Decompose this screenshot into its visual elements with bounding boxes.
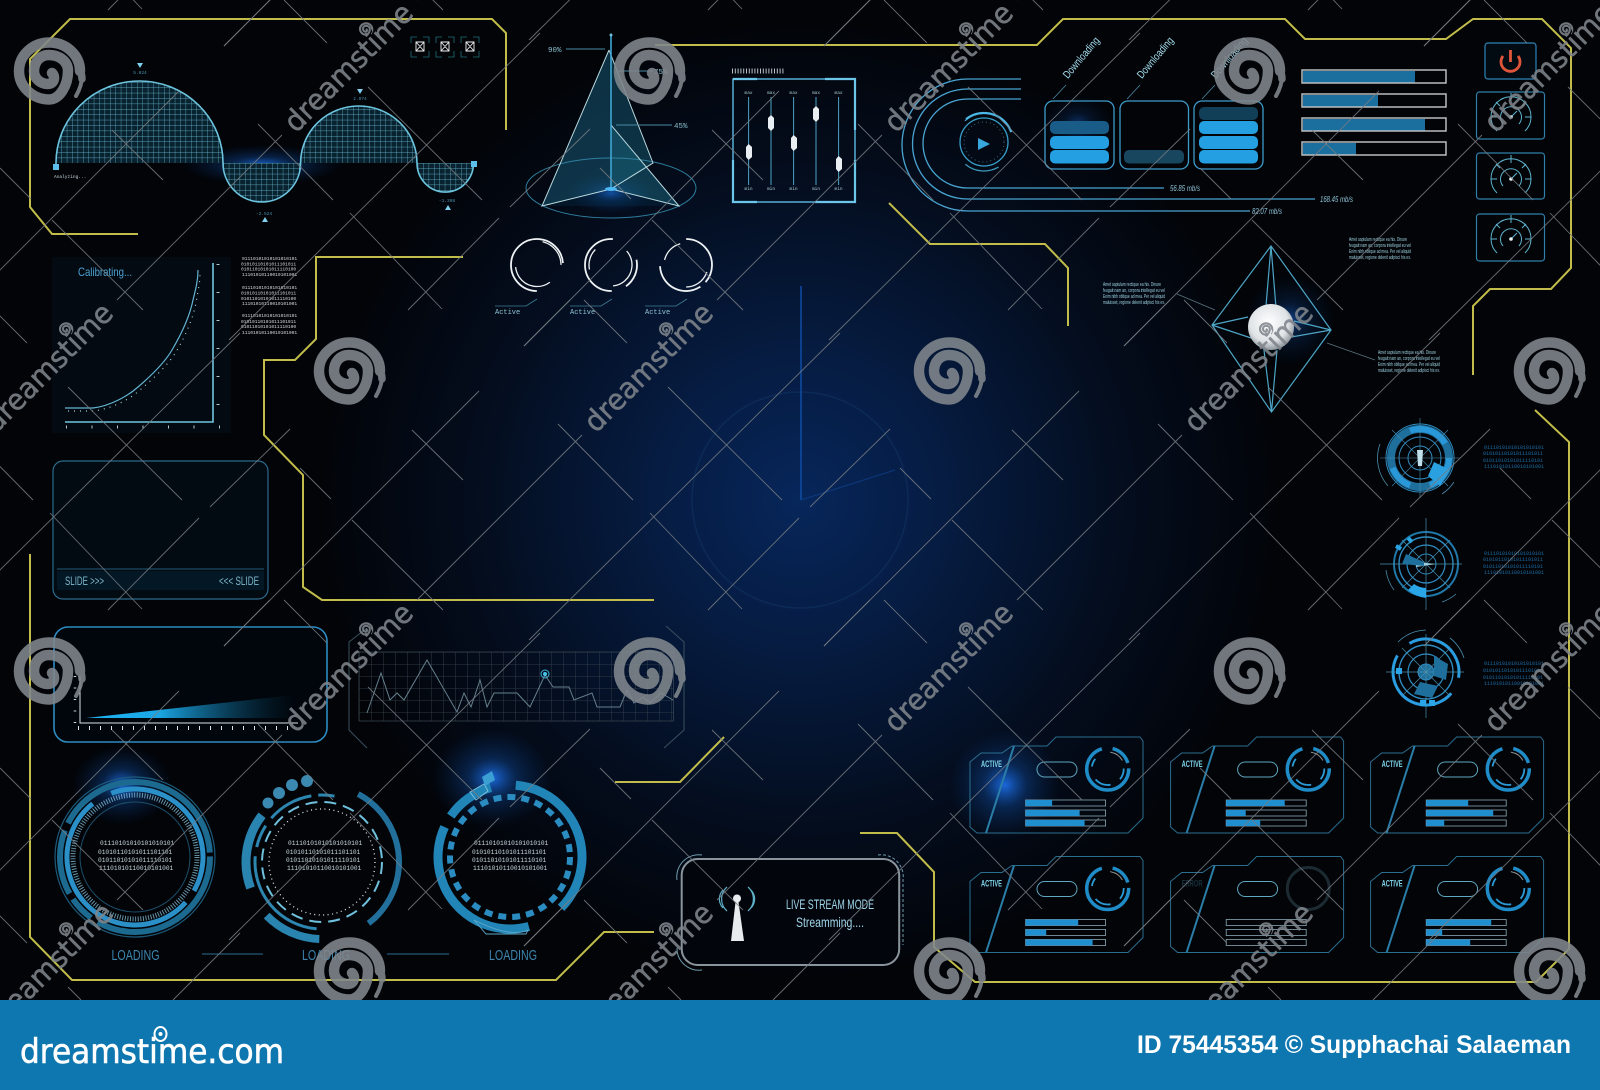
panel: downloading boxes: Downloading xyxy=(1061,35,1102,81)
panel: equalizer sliders: min xyxy=(745,186,753,192)
panel: live stream mode: LIVE STREAM MODE xyxy=(786,896,874,912)
panel: slide: <<< SLIDE xyxy=(219,574,259,588)
panel: sine wave grid chart: 5.024 xyxy=(133,70,147,76)
panel: equalizer sliders: min xyxy=(835,186,843,192)
panel: sine wave grid chart xyxy=(53,63,477,222)
card 4 xyxy=(970,856,1143,952)
footer logo: dreamstime.com xyxy=(20,1032,284,1072)
labels: transfer speed: 56.85 mb/s xyxy=(1170,184,1200,193)
text: binary side columns xyxy=(1483,445,1544,687)
card 3: ACTIVE xyxy=(1382,759,1403,769)
text: description blocks: Enim nibh oblique ad mea. Per vel aliquid xyxy=(1349,249,1411,255)
labels: transfer speed: 82.07 mb/s xyxy=(1252,207,1282,216)
text: binary inside rings: 11101010110010101001 xyxy=(99,865,174,872)
text: binary column: 01011010101011110100 xyxy=(241,266,296,272)
panel: downloading boxes: Downloading xyxy=(1135,35,1176,81)
dial: radar 3 xyxy=(1381,627,1471,718)
panel: equalizer sliders xyxy=(732,71,855,202)
text: binary column xyxy=(241,256,297,336)
labels: active xyxy=(495,299,687,317)
text: binary column: 11101010110010101001 xyxy=(242,272,297,278)
dial: radar 2 xyxy=(1380,518,1462,610)
text: binary column: 01110101010101010101 xyxy=(242,256,297,262)
panel: sine wave grid chart: 2.074 xyxy=(353,96,367,102)
panel: sine wave grid chart: Analyzing... xyxy=(54,174,86,180)
text: binary inside rings: 01010110101011101101 xyxy=(286,849,361,856)
text: description blocks: Amet sapiulam rectique ea his. Dinure xyxy=(1378,350,1436,356)
text: binary inside rings: 01011010101011110101 xyxy=(286,857,361,864)
panel: downloading boxes xyxy=(1045,35,1263,169)
text: description blocks: feugait nam an, corpora intellegat eu vel xyxy=(1378,356,1440,362)
text: binary column: 01010110101011101011 xyxy=(241,319,296,325)
labels: active: Active xyxy=(495,309,520,317)
panel: progress bars xyxy=(1302,70,1446,155)
diagram: polyhedron with sphere xyxy=(1177,246,1375,412)
button: power xyxy=(1485,43,1536,79)
text: binary side columns: 01110101010101010101 xyxy=(1484,551,1544,557)
text: binary side columns: 01011010101011110101 xyxy=(1483,675,1543,681)
card 4: ACTIVE xyxy=(981,878,1002,888)
panel: calibrating curve chart xyxy=(52,257,231,433)
icons: window controls xyxy=(411,37,479,57)
text: description blocks: feugait nam an, corpora intellegat eu vel xyxy=(1103,288,1165,294)
text: description blocks: maluisset, regione delenit adipisci his ex. xyxy=(1103,300,1165,306)
text: binary inside rings xyxy=(98,840,549,872)
panel: equalizer sliders: max xyxy=(835,91,843,96)
icon: antenna xyxy=(719,887,755,941)
panel: downloading boxes: Downloading xyxy=(1209,35,1250,81)
text: binary side columns: 11101010110010101001 xyxy=(1484,464,1544,470)
panel: equalizer sliders: max xyxy=(745,91,753,96)
text: binary side columns: 01011010101011110101 xyxy=(1483,564,1543,570)
text: description blocks: maluisset, regione delenit adipisci his ex. xyxy=(1349,255,1411,261)
panel: live stream mode: Streamming.... xyxy=(796,914,864,930)
labels: loading xyxy=(112,947,537,964)
watermark: spirals, wordmarks and crossed lines: dreamstime xyxy=(1177,896,1320,1039)
icons: active rings xyxy=(507,229,722,301)
text: binary side columns: 01011010101011110101 xyxy=(1483,458,1543,464)
text: binary column: 11101010110010101001 xyxy=(242,330,297,336)
text: binary side columns: 11101010110010101001 xyxy=(1484,681,1544,687)
labels: loading: LOADING xyxy=(112,947,160,964)
text: binary column: 01110101010101010101 xyxy=(242,285,297,291)
labels: transfer speed: 168.45 mb/s xyxy=(1320,195,1353,204)
card 6 xyxy=(1371,856,1544,952)
panel: area wedge chart xyxy=(54,627,327,742)
text: binary inside rings: 11101010110010101001 xyxy=(473,865,548,872)
text: binary side columns: 01010110101011101011 xyxy=(1483,451,1543,457)
footer banner xyxy=(0,1000,1600,1090)
panel: live stream mode xyxy=(677,855,903,970)
gauges: three dials xyxy=(1476,92,1544,261)
text: binary inside rings: 01110101010101010101 xyxy=(100,840,175,847)
panel: sine wave grid chart: -1.398 xyxy=(439,198,455,204)
text: binary side columns: 01010110101011101011 xyxy=(1483,557,1543,563)
text: description blocks: Amet sapiulam rectique ea his. Dinure xyxy=(1349,237,1407,243)
glow: blue lights xyxy=(72,95,1335,840)
text: binary inside rings: 01010110101011101101 xyxy=(98,849,173,856)
labels: loading: LOADING xyxy=(489,947,537,964)
text: description blocks: maluisset, regione delenit adipisci his ex. xyxy=(1378,368,1440,374)
panel: equalizer sliders: min xyxy=(812,186,820,192)
watermark: spirals, wordmarks and crossed lines: dreamstime xyxy=(577,896,720,1039)
panel: slide: SLIDE >>> xyxy=(65,574,104,588)
text: binary column: 01011010101011110100 xyxy=(241,324,296,330)
card 2: ACTIVE xyxy=(1182,759,1203,769)
card 3 xyxy=(1371,737,1544,833)
text: description blocks: Amet sapiulam rectique ea his. Dinure xyxy=(1103,282,1161,288)
chart: 3D cone percentages: 75% xyxy=(654,69,668,77)
ring: loading gauge 3 xyxy=(432,771,588,935)
ring: loading gauge 2 xyxy=(218,758,426,966)
card 5: error xyxy=(1171,856,1344,952)
text: binary inside rings: 01011010101011110101 xyxy=(98,857,173,864)
labels: active: Active xyxy=(645,309,670,317)
card 6: ACTIVE xyxy=(1382,878,1403,888)
dial: radar 1 xyxy=(1378,418,1460,498)
card 1 xyxy=(970,737,1143,833)
text: binary column: 01011010101011110100 xyxy=(241,296,296,302)
labels: loading: LOADING xyxy=(302,947,350,964)
chart: 3D cone percentages xyxy=(526,34,696,218)
text: binary side columns: 01110101010101010101 xyxy=(1484,661,1544,667)
labels: transfer speed xyxy=(1170,184,1353,216)
text: binary inside rings: 01110101010101010101 xyxy=(474,840,549,847)
panel: equalizer sliders: min xyxy=(790,186,798,192)
panel: sine wave grid chart: -2.524 xyxy=(256,211,272,217)
ring: loading gauge 1 xyxy=(48,770,222,944)
card 1: ACTIVE xyxy=(981,759,1002,769)
panel: line graph on grid xyxy=(349,626,684,748)
text: binary column: 11101010110010101001 xyxy=(242,301,297,307)
text: description blocks: Enim nibh oblique ad mea. Per vel aliquid xyxy=(1378,362,1440,368)
chart: 3D cone percentages: 90% xyxy=(548,47,562,55)
panel: slide xyxy=(53,461,268,599)
footer banner: ID 75445354 © Supphachai Salaeman xyxy=(1137,1031,1571,1059)
panel: equalizer sliders: max xyxy=(790,91,798,96)
text: description blocks xyxy=(1103,237,1440,374)
text: description blocks: feugait nam an, corpora intellegat eu vel xyxy=(1349,243,1411,249)
labels: active: Active xyxy=(570,309,595,317)
track: speed arcs with play button xyxy=(902,79,1315,211)
text: binary column: 01010110101011101011 xyxy=(241,290,296,296)
text: binary inside rings: 11101010110010101001 xyxy=(287,865,362,872)
panel: calibrating curve chart: Calibrating... xyxy=(78,265,132,279)
text: binary column: 01110101010101010101 xyxy=(242,313,297,319)
text: binary inside rings: 01110101010101010101 xyxy=(288,840,363,847)
panel: equalizer sliders: max xyxy=(812,91,820,96)
text: binary inside rings: 01011010101011110101 xyxy=(472,857,547,864)
text: binary side columns: 11101010110010101001 xyxy=(1484,570,1544,576)
card 2 xyxy=(1171,737,1344,833)
text: description blocks: Enim nibh oblique ad mea. Per vel aliquid xyxy=(1103,294,1165,300)
central faint radar xyxy=(692,286,908,608)
chart: 3D cone percentages: 45% xyxy=(674,123,688,131)
panel: equalizer sliders: max xyxy=(767,91,775,96)
text: binary inside rings: 01010110101011101101 xyxy=(472,849,547,856)
card 5: error: ERROR xyxy=(1182,878,1203,888)
text: binary side columns: 01110101010101010101 xyxy=(1484,445,1544,451)
text: binary side columns: 01010110101011101011 xyxy=(1483,668,1543,674)
panel: equalizer sliders: min xyxy=(767,186,775,192)
text: binary column: 01010110101011101011 xyxy=(241,262,296,268)
